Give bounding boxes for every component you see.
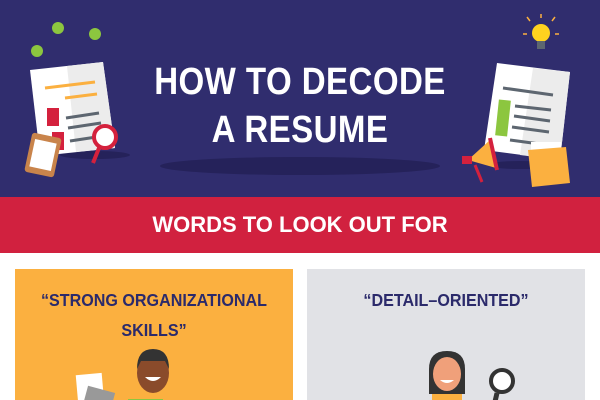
icon: right document bbox=[484, 63, 570, 169]
icon: folder bbox=[528, 142, 570, 187]
title: HOW TO DECODE bbox=[154, 61, 446, 103]
title bbox=[154, 61, 446, 151]
illustration: man with papers bbox=[76, 349, 169, 400]
header illustrations bbox=[24, 14, 570, 187]
panel heading: SKILLS” bbox=[121, 320, 187, 340]
panel heading: “STRONG ORGANIZATIONAL bbox=[41, 290, 267, 310]
title shadow bbox=[160, 157, 440, 175]
illustration: woman with magnifier bbox=[429, 351, 515, 400]
icon: lightbulb bbox=[523, 14, 559, 49]
icon: left document bbox=[30, 62, 130, 159]
header panel bbox=[0, 0, 600, 197]
panel heading bbox=[41, 290, 267, 340]
panel: strong organizational skills bbox=[15, 269, 293, 400]
icon: clipboard bbox=[24, 132, 62, 178]
panel heading: “DETAIL–ORIENTED” bbox=[363, 290, 529, 310]
icon: green dots bbox=[31, 22, 101, 57]
section banner: WORDS TO LOOK OUT FOR bbox=[152, 212, 448, 237]
panel: detail-oriented bbox=[307, 269, 585, 400]
icon: magnifier bbox=[93, 126, 116, 163]
section banner bbox=[0, 197, 600, 253]
title: A RESUME bbox=[212, 109, 388, 151]
icon: megaphone bbox=[462, 138, 497, 182]
